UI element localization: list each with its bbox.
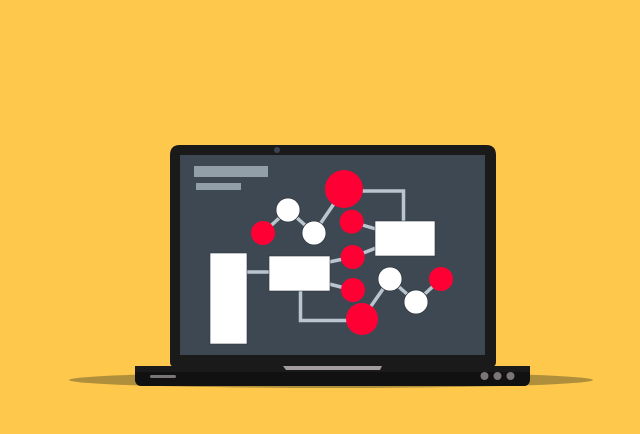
webcam <box>274 147 280 153</box>
connector lines <box>246 189 441 320</box>
laptop lid <box>170 145 496 367</box>
screen <box>180 155 485 355</box>
white process boxes <box>210 221 435 344</box>
left vent slot <box>150 375 176 378</box>
white nodes <box>276 198 428 314</box>
header placeholder bars <box>194 166 268 190</box>
red nodes <box>251 170 453 335</box>
status buttons <box>480 372 514 380</box>
ground shadow <box>69 372 593 388</box>
laptop base <box>135 366 530 386</box>
trackpad notch <box>283 366 382 370</box>
